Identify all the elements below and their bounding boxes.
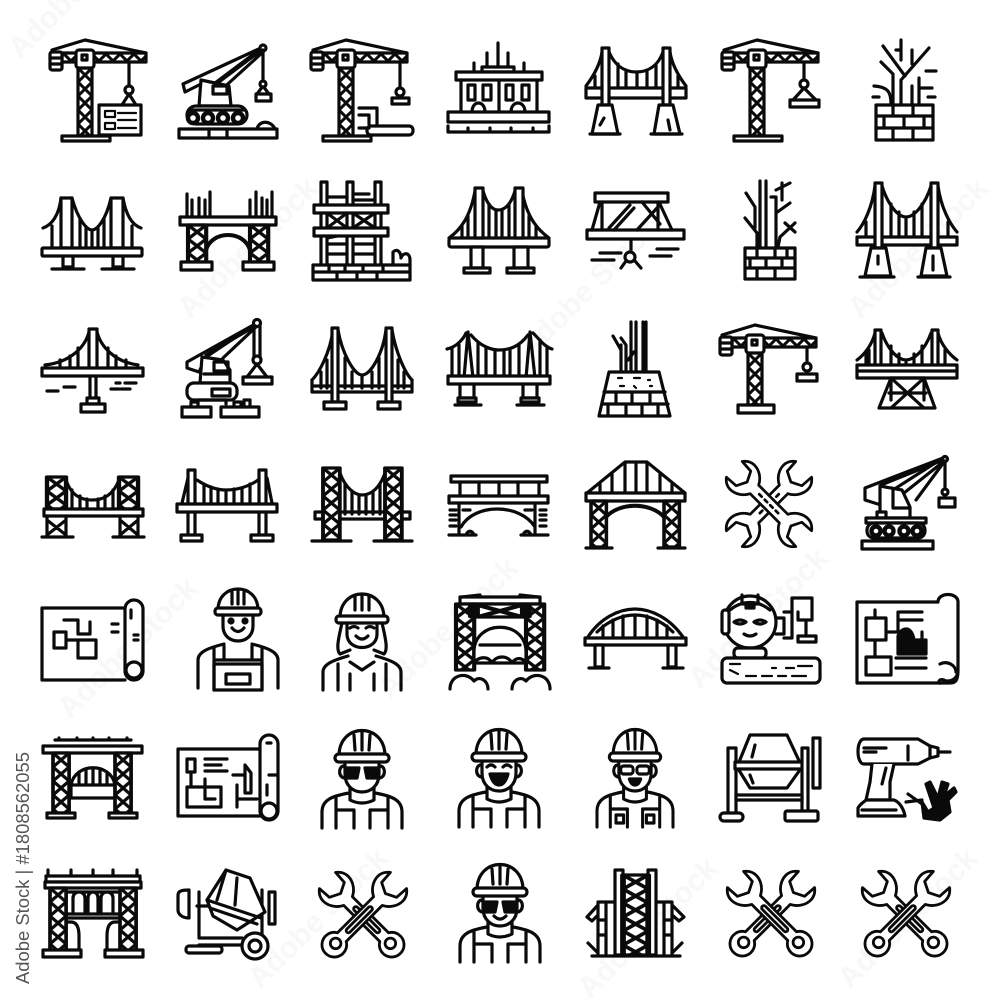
watermark: Adobe Stock	[172, 172, 325, 325]
icon: crawler crane	[862, 456, 955, 549]
icon: stone arch bridge	[449, 476, 548, 535]
icon: suspension bridge, tall towers	[312, 328, 412, 409]
icon: blueprint	[857, 594, 958, 683]
icon: suspension bridge, flat cable	[447, 332, 552, 405]
icon: blueprint	[178, 735, 278, 820]
icon: arch bridge	[585, 609, 686, 668]
icon: lattice tower bridge	[42, 477, 144, 537]
icon: wall with bare tree	[873, 40, 936, 140]
icon: suspension bridge, tapered piers	[857, 183, 957, 277]
icon: crossed wrenches	[722, 457, 816, 551]
icon: Manhattan style bridge	[43, 870, 143, 957]
icon: lattice tunnel	[450, 595, 550, 689]
icon: crossed wrenches	[313, 868, 413, 966]
icon: smiling worker	[459, 730, 539, 827]
icon: crossed wrenches	[856, 867, 956, 965]
icon: crane with pipe	[311, 40, 413, 141]
icon: bridge under construction	[448, 43, 549, 132]
icon: tilted concrete mixer	[178, 870, 275, 959]
icon: rebar arch bridge	[180, 192, 276, 270]
watermark: Adobe Stock	[682, 542, 835, 695]
icon: operator with control panel	[722, 595, 820, 683]
icon: lattice suspension bridge	[312, 468, 412, 541]
icon: suspension bridge with columns	[449, 188, 549, 273]
icon: truss bridge with hook	[587, 193, 684, 268]
icon: lattice tower between spans	[587, 870, 684, 956]
watermark: Adobe Stock	[842, 172, 995, 325]
icon: lattice bridge with arch	[43, 738, 142, 818]
icon: suspension bridge, thin towers	[177, 470, 277, 541]
icon: worker with sunglasses	[322, 730, 402, 828]
watermark: Adobe Stock	[242, 842, 395, 995]
icon: crane with sign	[50, 40, 146, 141]
icon: suspension bridge on lattice pier	[857, 330, 957, 408]
icon: mobile crane	[182, 320, 272, 417]
icon: worker with overalls	[198, 589, 278, 690]
icon: woman worker	[323, 594, 401, 690]
watermark: Adobe Stock	[52, 572, 205, 725]
icon: worker with glasses	[597, 730, 673, 827]
watermark: Adobe Stock	[372, 552, 525, 705]
stock credit: Adobe Stock | #1808562055	[13, 752, 33, 984]
icon: pier with rebar	[599, 322, 670, 416]
icon: cordless drill	[858, 739, 956, 820]
watermark: Adobe Stock	[512, 212, 665, 365]
icon: tower crane	[720, 325, 817, 413]
icon: suspension bridge, tapered piers	[586, 48, 686, 134]
icon: scaffold	[313, 182, 410, 280]
watermark: Adobe Stock	[832, 842, 985, 995]
icon: crossed wrenches	[721, 867, 821, 965]
icon: arch lattice bridge	[586, 462, 685, 548]
icon: blueprint	[42, 600, 143, 680]
icon: concrete mixer	[720, 735, 820, 821]
icon: crawler crane	[179, 45, 277, 138]
icon: tower crane with hook	[722, 40, 819, 141]
icon: worker with sunglasses	[460, 864, 540, 962]
icon: suspension bridge	[42, 198, 142, 269]
icon: wall with rebar	[745, 181, 795, 279]
icon: suspension bridge over water	[42, 329, 143, 412]
